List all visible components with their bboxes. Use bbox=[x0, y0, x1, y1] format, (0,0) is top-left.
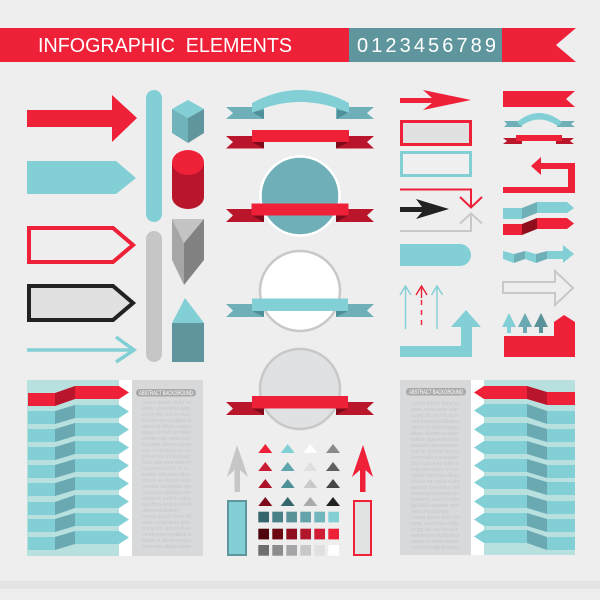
arrow: zigzag teal bbox=[503, 245, 574, 263]
text block: ercitation ullamco labore bbox=[142, 442, 191, 448]
text block: labore et dolore magna bbox=[142, 538, 191, 544]
text block: iscing elit, sed do eius- bbox=[411, 527, 459, 533]
text block: iscing elit, sed do eius- bbox=[411, 413, 459, 419]
strip: red bbox=[28, 386, 129, 406]
arrow: gray line up bbox=[400, 214, 482, 231]
text block: labore et dolore magna bbox=[411, 539, 459, 545]
arrow: solid red bbox=[27, 95, 137, 142]
text block: dolore eu fugiat nulla bbox=[142, 478, 191, 484]
palette: squares bbox=[258, 512, 339, 556]
title: INFOGRAPHIC ELEMENTS bbox=[38, 35, 292, 57]
text block: Duis aute irure dolor in bbox=[411, 461, 459, 467]
box: red bbox=[354, 501, 371, 555]
text block: anim id est laborum. bbox=[411, 509, 449, 515]
text block: labore et dolore magna bbox=[142, 424, 191, 430]
text block: veniam, quis nostrud ex- bbox=[411, 437, 459, 443]
box: teal outline bbox=[402, 152, 470, 176]
strip arrow: teal bbox=[503, 202, 574, 219]
text block: qui officia deserunt molit bbox=[411, 503, 460, 509]
text block: commodo aliquip labore bbox=[411, 545, 459, 551]
panel: right strips bbox=[471, 380, 575, 555]
text block: Lorem ipsum dolor sit bbox=[142, 514, 192, 520]
ribbon: small red bbox=[503, 135, 574, 144]
text block: amet, consectetur adip- bbox=[142, 406, 191, 412]
arrow: red spear bbox=[400, 90, 471, 110]
arrow: teal corner bbox=[400, 310, 481, 357]
strips: teal bbox=[474, 404, 575, 550]
text block: anim id est laborum. bbox=[142, 508, 180, 514]
text block bbox=[411, 401, 460, 551]
text block: luptate velit esse cillum bbox=[142, 472, 191, 478]
tab: teal bbox=[400, 244, 471, 266]
text block: reprehenderit in vo- bbox=[411, 467, 459, 473]
text block: commodo consequat. bbox=[411, 455, 459, 461]
arrow: gray up bbox=[227, 445, 248, 492]
text block: occaecat cupidatat non bbox=[411, 491, 459, 497]
icon: prism bbox=[172, 219, 204, 285]
arrow: black spear bbox=[400, 199, 449, 219]
text block: pariatur. Excepteur sint bbox=[411, 485, 460, 491]
text block: mod tempor incididunt ut bbox=[142, 418, 192, 424]
numbers: 0123456789 bbox=[357, 35, 496, 57]
text block: nisi ut aliquip ex ea bbox=[411, 449, 459, 455]
panel: left strips bbox=[27, 380, 132, 556]
text block: Duis aute irure dolor in bbox=[142, 460, 191, 466]
arrows: thin trio bbox=[400, 286, 442, 329]
arrow: red u-turn bbox=[503, 157, 575, 193]
box: teal bbox=[228, 501, 246, 555]
text block: mod tempor incididunt ut bbox=[142, 532, 192, 538]
text block: pariatur. Excepteur sint bbox=[142, 484, 192, 490]
text block: luptate velit esse cillum bbox=[411, 473, 459, 479]
text block: Lorem ipsum dolor sit bbox=[411, 515, 460, 521]
icon: house bbox=[172, 298, 204, 362]
pill: teal bbox=[146, 90, 162, 222]
ribbon: teal bbox=[226, 298, 374, 317]
icon: cylinder bbox=[172, 150, 204, 209]
text block: labore et dolore magna bbox=[411, 425, 459, 431]
strips: teal bbox=[28, 405, 129, 550]
strip: red bbox=[474, 386, 575, 405]
tag: abstract background bbox=[406, 388, 466, 396]
text block: commodo aliquip labore bbox=[142, 544, 191, 550]
ribbon: red bbox=[226, 130, 374, 148]
text block: aliqua. Ut enim ad minim bbox=[411, 431, 459, 437]
badge: gray circle bbox=[226, 349, 374, 429]
text block: reprehenderit in vo- bbox=[142, 466, 191, 472]
pill: gray bbox=[146, 231, 162, 362]
badge: white circle bbox=[226, 251, 374, 331]
text block: commodo consequat. bbox=[142, 454, 191, 460]
palette: triangles bbox=[258, 444, 340, 506]
text block: ercitation ullamco labore bbox=[411, 443, 459, 449]
icon: cube bbox=[172, 100, 204, 143]
text block: amet, consectetur adip- bbox=[411, 521, 459, 527]
text block bbox=[142, 400, 192, 550]
badge: teal circle bbox=[226, 156, 374, 236]
arrow: thin teal bbox=[27, 337, 134, 362]
text block: iscing elit, sed do eius- bbox=[142, 526, 191, 532]
box: red outline bbox=[402, 122, 470, 144]
header banner bbox=[0, 28, 576, 62]
ribbon: arched teal bbox=[226, 90, 374, 119]
panel: left text bbox=[132, 380, 203, 556]
ribbon: red bbox=[226, 204, 374, 222]
text block: qui officia deserunt molit bbox=[142, 502, 192, 508]
text block: Lorem ipsum dolor sit bbox=[142, 400, 192, 406]
text block: proident, sunt in culpa bbox=[411, 497, 459, 503]
arrows: small trio bbox=[502, 313, 548, 333]
text block: iscing elit, sed do eius- bbox=[142, 412, 191, 418]
text block: veniam, quis nostrud ex- bbox=[142, 436, 191, 442]
arrow tag: teal bbox=[27, 161, 136, 194]
text block: occaecat cupidatat non bbox=[142, 490, 191, 496]
arrow tag: black outline bbox=[29, 286, 133, 320]
tag: abstract background bbox=[136, 389, 196, 397]
ribbon: red bbox=[226, 396, 374, 415]
text block: amet, consectetur adip- bbox=[142, 520, 191, 526]
text block: amet, consectetur adip- bbox=[411, 407, 459, 413]
tag: abstract background: ABSTRACT BACKGROUND bbox=[139, 391, 193, 397]
text block: nisi ut aliquip ex ea bbox=[142, 448, 191, 454]
text block: proident, sunt in culpa bbox=[142, 496, 191, 502]
banner: red flag bbox=[503, 91, 575, 107]
shape: red house bbox=[504, 315, 575, 357]
strip arrow: red bbox=[503, 218, 574, 235]
text block: aliqua. Ut enim ad minim bbox=[142, 430, 191, 436]
arrow: red up bbox=[352, 445, 373, 492]
arrow: gray outline bbox=[503, 271, 573, 305]
ribbon: small arched teal bbox=[504, 113, 575, 127]
arrow: red line down bbox=[400, 190, 482, 208]
text block: Lorem ipsum dolor sit bbox=[411, 401, 460, 407]
tag: abstract background: ABSTRACT BACKGROUND bbox=[409, 390, 463, 396]
arrow tag: red outline bbox=[29, 228, 133, 262]
text block: mod tempor incididunt ut bbox=[411, 533, 460, 539]
panel: right text bbox=[400, 380, 471, 555]
text block: dolore eu fugiat nulla bbox=[411, 479, 459, 485]
text block: mod tempor incididunt ut bbox=[411, 419, 460, 425]
